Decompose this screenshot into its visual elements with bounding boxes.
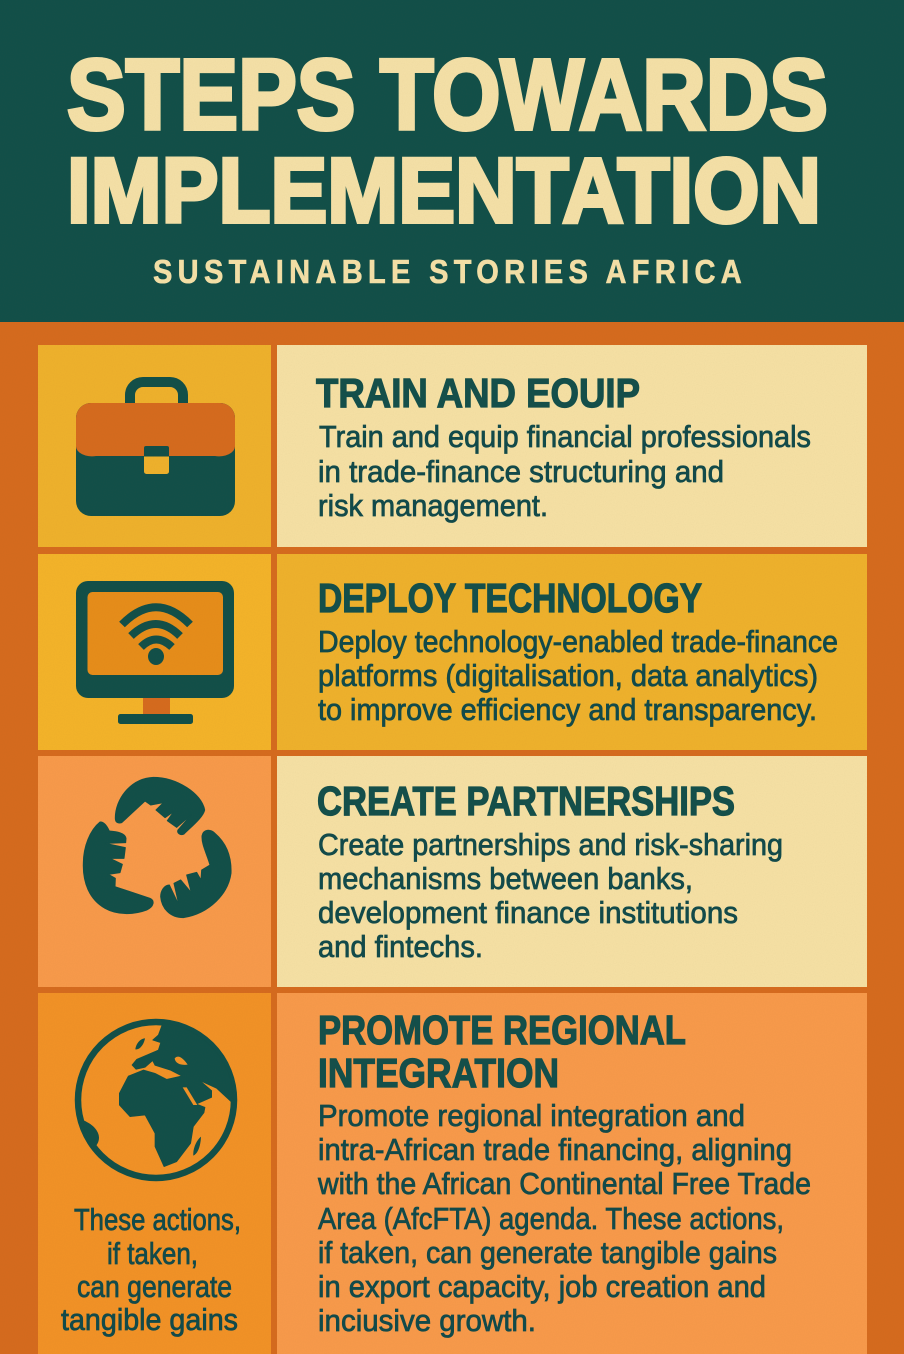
body text [317,1098,811,1338]
body text [318,419,811,523]
body text: mechanisms between banks, [318,861,693,896]
side note: if taken, [107,1236,198,1271]
body text: Create partnerships and risk-sharing [318,827,783,862]
body text: platforms (digitalisation, data analytics) [318,658,818,693]
icon panel: three hands [38,756,271,987]
body text: inciusive growth. [318,1303,536,1338]
side note: These actions, [74,1202,241,1237]
body text: if taken, can generate tangible gains [318,1235,777,1270]
side note [61,1202,241,1337]
text panel: train and equip [277,345,867,547]
icon panel: globe and side note [38,993,271,1354]
text panel: deploy technology [277,554,867,750]
body text [318,624,838,727]
heading: CREATE PARTNERSHIPS [317,778,735,824]
heading [318,1007,686,1096]
body text: Train and equip financial professionals [319,419,811,454]
subtitle: SUSTAINABLE STORIES AFRICA [153,253,742,290]
panel: promote regional integration [38,993,867,1354]
icon: globe [78,1022,234,1178]
heading: DEPLOY TECHNOLOGY [318,575,702,621]
body text: risk management. [318,488,548,523]
body text: and fintechs. [318,929,483,964]
header band [0,0,904,322]
body text: Deploy technology-enabled trade-finance [318,624,838,659]
body text: in trade-finance structuring and [318,454,724,489]
icon panel: monitor with wifi [38,554,271,750]
text panel: promote regional integration [277,993,867,1354]
body text [318,827,783,964]
side note: can generate [77,1269,232,1304]
title [67,39,828,242]
icon panel: briefcase [38,345,271,547]
body text: development finance institutions [318,895,738,930]
heading: PROMOTE REGIONAL [318,1007,686,1053]
side note: tangible gains [61,1302,238,1337]
panel: create partnerships [38,756,867,987]
body text: intra-African trade financing, aligning [318,1132,792,1167]
heading: INTEGRATION [318,1050,559,1096]
body text: with the African Continental Free Trade [317,1166,811,1201]
heading: TRAIN AND EOUIP [316,370,640,416]
body text: in export capacity, job creation and [318,1269,766,1304]
title: IMPLEMENTATION [67,140,821,242]
text panel: create partnerships [277,756,867,987]
body text: to improve efficiency and transparency. [318,692,817,727]
body text: Area (AfcFTA) agenda. These actions, [318,1201,784,1236]
body text: Promote regional integration and [318,1098,745,1133]
panel: deploy technology [38,554,867,750]
panel: train and equip [38,345,867,547]
